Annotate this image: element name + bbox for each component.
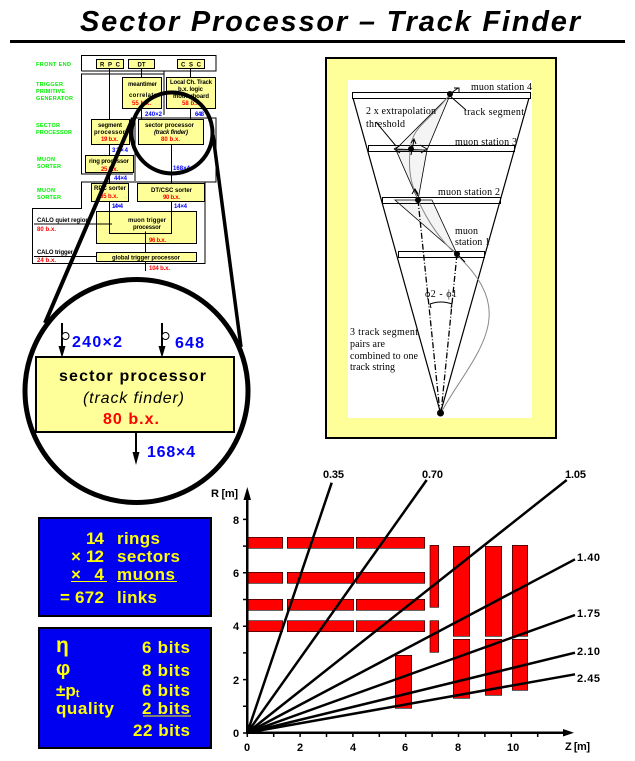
panel: data bits: 8 bits — [142, 661, 190, 680]
station labels: muon station 4 — [471, 82, 532, 93]
segment pointers — [376, 88, 466, 262]
calorimeter inputs: CALO quiet region — [37, 218, 89, 224]
link counts: 240×2 — [145, 112, 163, 118]
calorimeter inputs: 104 b.x. — [149, 266, 170, 272]
block: RPC sorter — [92, 184, 128, 202]
block: DT/CSC sorter — [138, 184, 204, 202]
link counts: 14×4 — [112, 204, 124, 210]
block: segment processor: 19 b.x. — [101, 137, 118, 143]
axis labels: 2 — [297, 742, 303, 754]
block: local track board — [166, 78, 216, 108]
block: local track board: motherboard — [173, 94, 209, 100]
stage labels: FRONT END — [36, 62, 71, 68]
stage labels: SECTOR — [36, 123, 60, 129]
panel: data bits: ±p — [56, 681, 76, 700]
axis labels: 0 — [244, 742, 250, 754]
block: RPC sorter: RPC sorter — [94, 186, 127, 192]
line labels — [323, 469, 600, 685]
line labels: 0.35 — [323, 469, 344, 481]
panel: trigger system block diagram — [32, 56, 216, 272]
panel: data bits: 6 bits — [142, 638, 190, 657]
panel: links count: × — [71, 565, 81, 584]
station labels: station 1 — [455, 237, 490, 248]
stage labels: GENERATOR — [36, 96, 73, 102]
link counts — [112, 112, 205, 210]
panel: links count: 12 — [86, 547, 104, 566]
block: ring processor — [86, 156, 134, 173]
stage labels: PROCESSOR — [36, 130, 72, 136]
stage labels: SORTER — [37, 164, 61, 170]
block: muon trigger processor: processor — [133, 225, 162, 231]
panel: links count: rings — [117, 529, 160, 548]
block: RPC: RPC — [100, 62, 121, 68]
magnifier: lens with enlarged sector processor — [25, 92, 248, 502]
enlarged sector processor block: 80 b.x. — [103, 411, 159, 428]
arrow: 168x4 output — [132, 432, 195, 465]
axis labels: 2 — [233, 675, 239, 687]
block: ring processor: 25 b.x. — [101, 167, 118, 173]
stage labels: PRIMITIVE — [36, 89, 65, 95]
panel: links count: muons — [117, 565, 175, 584]
block: DT — [128, 60, 154, 68]
panel: data bits — [39, 628, 211, 748]
muon stations — [352, 92, 530, 258]
panel: data bits: φ — [56, 658, 70, 680]
panel: data bits: η — [56, 634, 69, 657]
block: CSC — [178, 60, 204, 68]
block: DT: DT — [138, 62, 146, 68]
axis labels: 0 — [233, 728, 239, 740]
enlarged sector processor block — [36, 357, 234, 432]
enlarged sector processor block: (track finder) — [83, 390, 184, 407]
panel: data bits: t — [76, 688, 80, 700]
station labels: muon — [455, 226, 478, 237]
axis labels: 8 — [455, 742, 461, 754]
block: global trigger processor: global trigger processor — [112, 256, 181, 262]
diagram frame lines — [32, 56, 216, 271]
angle arc — [430, 302, 452, 308]
axis labels: 6 — [402, 742, 408, 754]
block: sector processor small: (track finder) — [154, 130, 188, 136]
station labels: pairs are — [350, 339, 386, 350]
enlarged sector processor block: sector processor — [59, 368, 206, 385]
panel: links count: sectors — [117, 547, 180, 566]
panel: data bits: 6 bits — [142, 681, 190, 700]
station labels: combined to one — [350, 351, 419, 362]
station labels: threshold — [366, 119, 405, 130]
arrow: 240x2 input: 240×2 — [72, 334, 122, 351]
pseudorapidity lines — [247, 480, 575, 733]
stage labels: SORTER — [37, 195, 61, 201]
link counts: 14×4 — [174, 204, 188, 210]
block: global trigger processor — [96, 252, 196, 262]
block: sector processor small: 80 b.x. — [161, 137, 180, 143]
detector cone — [353, 98, 529, 411]
block: meantimer correlator: 55 b.x. — [132, 101, 151, 107]
block: meantimer correlator — [122, 78, 162, 108]
line labels: 1.75 — [577, 608, 600, 620]
panel: data bits: quality — [56, 699, 115, 718]
axes — [244, 487, 574, 736]
link counts: 168×4 — [173, 166, 191, 172]
block: local track board: 58 b.x. — [182, 101, 201, 107]
block: meantimer correlator: meantimer — [128, 82, 158, 88]
station labels: track segment — [464, 107, 524, 118]
stage labels: MUON — [37, 188, 55, 194]
line labels: 1.40 — [577, 552, 600, 564]
link counts: 44×4 — [114, 176, 128, 182]
track segment points — [408, 91, 460, 416]
station labels: ϕ2 - ϕ1 — [425, 289, 457, 300]
block: CSC: CSC — [181, 62, 202, 68]
station labels: muon station 2 — [438, 187, 500, 198]
block: RPC — [96, 60, 124, 68]
white drawing area — [348, 80, 532, 418]
arrow: 648 input — [158, 323, 204, 358]
line labels: 0.70 — [422, 469, 443, 481]
panel: links count: = — [60, 588, 70, 607]
axis labels: 6 — [233, 568, 239, 580]
stage labels — [36, 62, 73, 201]
line labels: 2.45 — [577, 673, 600, 685]
panel: links count: 14 — [86, 529, 105, 548]
axis labels — [211, 488, 590, 754]
panel: links count: 4 — [95, 565, 105, 584]
axis labels: R [m] — [211, 488, 238, 500]
block: segment processor: segment — [98, 123, 122, 129]
magnifier lens lines — [25, 92, 248, 502]
panel: data bits: 22 bits — [133, 721, 190, 740]
calorimeter inputs: 80 b.x. — [37, 227, 56, 233]
panel: links count: × — [71, 547, 81, 566]
panel: links count — [39, 518, 211, 616]
station labels: 2 x extrapolation — [366, 106, 436, 117]
axis ticks — [243, 519, 538, 737]
panel: data bits: 2 bits — [142, 699, 190, 718]
curved muon track — [409, 94, 489, 413]
block: DT/CSC sorter: DT/CSC sorter — [151, 188, 193, 194]
link counts: 32×4 — [112, 148, 129, 154]
stage labels: TRIGGER — [36, 82, 63, 88]
calorimeter inputs: CALO trigger — [37, 250, 74, 256]
block: segment processor: processor — [94, 130, 126, 136]
station labels: 3 track segment — [350, 327, 418, 338]
block: DT/CSC sorter: 90 b.x. — [163, 195, 180, 201]
axis labels: 4 — [233, 621, 240, 633]
block: segment processor — [92, 120, 130, 144]
block: ring processor: ring processor — [89, 159, 130, 165]
station labels — [350, 82, 532, 373]
arrow: 240x2 input — [58, 323, 122, 358]
red detector chambers — [247, 537, 528, 708]
station labels: muon station 3 — [455, 137, 517, 148]
panel: links count: links — [117, 588, 157, 607]
title: Sector Processor – Track Finder — [80, 6, 582, 38]
panel: links count: 672 — [75, 588, 104, 607]
block: meantimer correlator: correlator — [129, 93, 161, 99]
calorimeter inputs — [37, 218, 170, 272]
dash-dot axes to the vertex — [418, 200, 457, 413]
crossing lines and junctions over the muon trigger block — [96, 211, 172, 243]
axis labels: 8 — [233, 515, 239, 527]
block: muon trigger processor — [96, 212, 196, 244]
axis labels: Z [m] — [565, 741, 590, 753]
block: RPC sorter: 65 b.x. — [100, 194, 118, 200]
block: local track board: Local Ch. Track — [170, 80, 213, 86]
calorimeter inputs: 24 b.x. — [37, 258, 56, 264]
axis labels: 4 — [350, 742, 357, 754]
line labels: 1.05 — [565, 469, 586, 481]
arrow: 168x4 output: 168×4 — [147, 444, 195, 461]
panel background — [326, 58, 556, 438]
line labels: 2.10 — [577, 646, 600, 658]
stage labels: MUON — [37, 157, 55, 163]
shaded extrapolation windows — [395, 95, 457, 254]
block: local track board: b.x. logic — [178, 87, 204, 93]
block: muon trigger processor: muon trigger — [128, 218, 167, 224]
station labels: track string — [350, 362, 395, 373]
arrow: 648 input: 648 — [175, 335, 204, 352]
link counts: 648 — [195, 112, 205, 118]
block: sector processor small — [138, 120, 204, 144]
axis labels: 10 — [507, 742, 519, 754]
block: sector processor small: sector processor — [145, 123, 195, 129]
chart: detector cross-section with pseudorapidity lines — [211, 469, 600, 754]
panel: muon station extrapolation diagram — [326, 58, 556, 438]
block: muon trigger processor: 96 b.x. — [149, 238, 166, 244]
